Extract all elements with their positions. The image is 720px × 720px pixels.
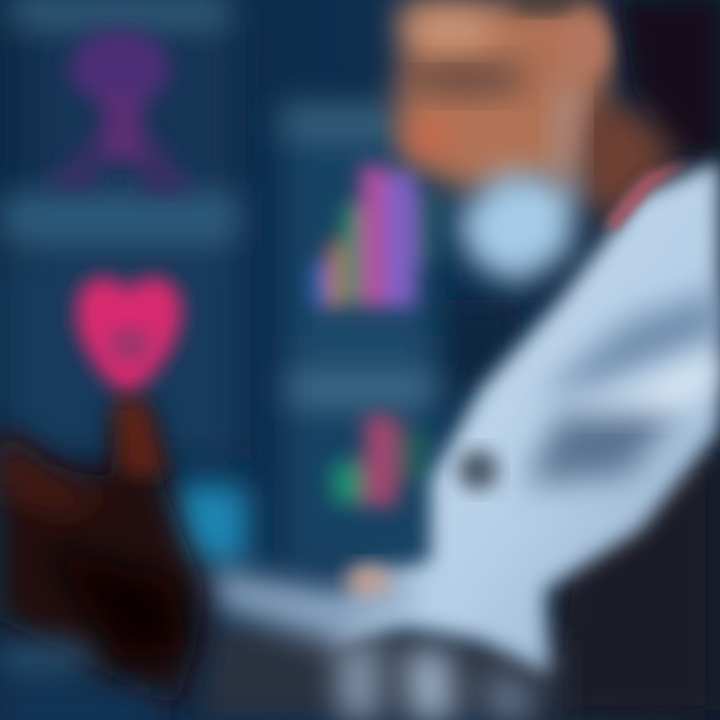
hair [620,0,720,155]
bar chart: upper [312,165,435,308]
lower left panel glow [0,645,160,720]
wrist skin [346,564,390,596]
coat button [458,450,498,490]
icon: purple figure [45,30,195,192]
coat red collar trim [605,160,690,230]
dark trousers lower centre [200,625,560,720]
coat fold shadow [540,290,720,395]
icon: cyan tile [172,484,248,564]
dark coat shadow lower right [540,430,720,720]
sleeve [205,570,420,645]
right data panel [280,105,520,570]
coat fold shadow lower [525,400,680,485]
surgical mask [455,172,575,285]
coat highlight [560,350,720,410]
lab coat [330,160,720,675]
hand [0,400,205,710]
neck [575,100,680,225]
left data panel [0,0,240,460]
sleeve folds [335,640,535,720]
mask ear strap [552,85,582,190]
icon: pink heart [76,276,182,398]
bar chart: lower [332,415,430,507]
face [395,0,611,190]
